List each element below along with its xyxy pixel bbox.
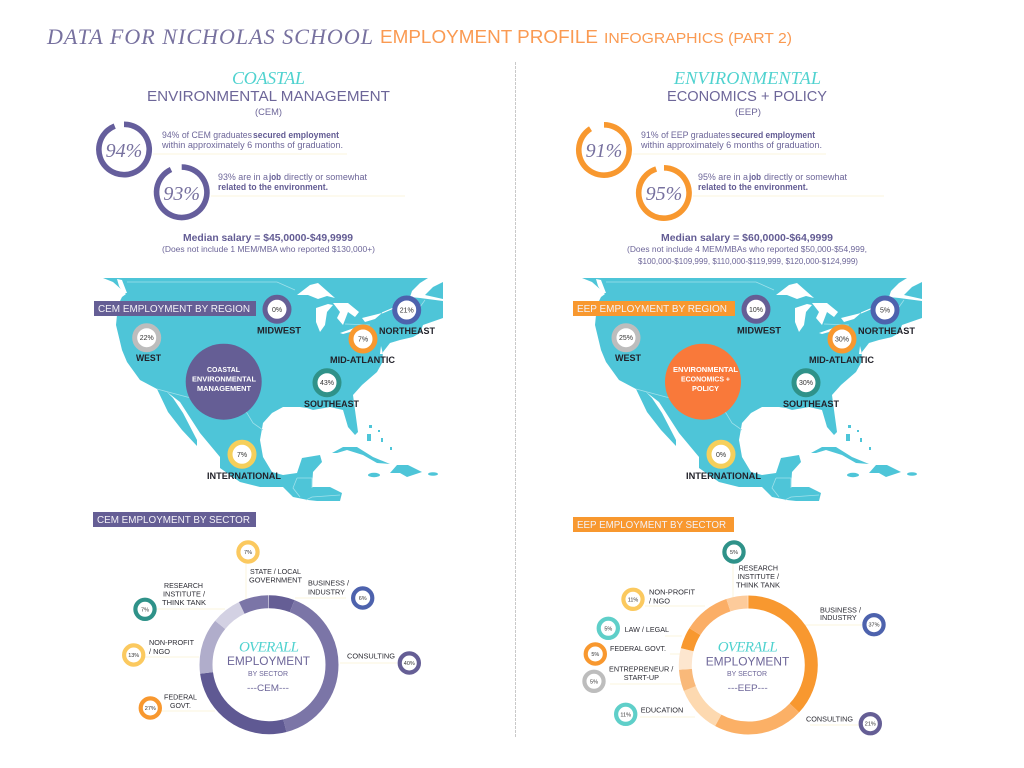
- region: Mid-Atlantic: [330, 327, 395, 366]
- sector: Business: INDUSTRY: [308, 587, 345, 596]
- text: related jobs: [693, 172, 884, 196]
- region: West: WEST: [136, 353, 161, 364]
- sector: Non-profit: [623, 588, 695, 609]
- sector: Law: 5%: [604, 626, 612, 632]
- badge: EEP region heading: EEP EMPLOYMENT BY REGION: [577, 303, 727, 315]
- median salary: [162, 232, 375, 254]
- text: related jobs: directly or somewhat: [764, 172, 848, 182]
- region: Northeast: NORTHEAST: [858, 326, 915, 337]
- sector: Federal: GOVT.: [170, 701, 191, 710]
- center circle: COASTAL: [207, 365, 240, 374]
- sector: State / Local: STATE / LOCAL: [250, 567, 301, 576]
- ring: 94% employed: 94%: [106, 140, 142, 162]
- center circle: [186, 344, 262, 420]
- center circle: POLICY: [692, 384, 719, 393]
- sector: Non-profit: NON-PROFIT: [149, 638, 194, 647]
- region: West: WEST: [615, 353, 641, 364]
- median salary: (Does not include 4 MEM/MBAs who reported $50,000-$54,999,: [627, 244, 867, 254]
- sector: Research: [135, 581, 206, 619]
- text: employment rate: [153, 130, 347, 154]
- donut chart: EEP: [685, 602, 811, 728]
- text: related jobs: related to the environment.: [218, 182, 328, 192]
- sector: Research: [724, 542, 780, 590]
- region: Northeast: [858, 298, 915, 337]
- region: Midwest: 0%: [272, 307, 282, 314]
- text: employment rate: secured employment: [253, 130, 339, 140]
- region: Southeast: SOUTHEAST: [304, 399, 359, 410]
- sector: Education: EDUCATION: [641, 706, 683, 715]
- sector: Non-profit: 11%: [628, 597, 638, 603]
- sector: Federal: 5%: [591, 652, 599, 658]
- region: Northeast: [379, 298, 435, 337]
- region: West: [614, 326, 641, 364]
- center circle: ENVIRONMENTAL: [192, 374, 256, 384]
- panel: EEP: [573, 68, 922, 733]
- sector: State / Local: 7%: [244, 550, 252, 556]
- region: Midwest: MIDWEST: [257, 326, 301, 337]
- region: International: 0%: [716, 452, 726, 459]
- badge: CEM region heading: CEM EMPLOYMENT BY REGION: [98, 303, 250, 315]
- sector: Research: 5%: [730, 550, 738, 556]
- text: related jobs: [211, 172, 405, 196]
- region: International: INTERNATIONAL: [686, 471, 761, 482]
- sector: Business: [820, 605, 884, 634]
- text: employment rate: 94% of CEM graduates: [162, 130, 252, 140]
- median salary: [627, 232, 867, 266]
- region: Mid-Atlantic: MID-ATLANTIC: [330, 355, 395, 366]
- sector: Education: [616, 705, 683, 724]
- median salary: (Does not include 1 MEM/MBA who reported $130,000+): [162, 244, 375, 254]
- donut center text: EEP: BY SECTOR: [727, 669, 768, 678]
- sector: Consulting: [806, 714, 880, 733]
- badge: EEP sector heading: EEP EMPLOYMENT BY SECTOR: [577, 519, 726, 531]
- heading: EEP: ECONOMICS + POLICY: [667, 89, 827, 105]
- text: employment rate: within approximately 6 months of graduation.: [640, 140, 822, 150]
- region: International: [207, 442, 281, 482]
- region: Mid-Atlantic: 30%: [835, 336, 849, 344]
- text: employment rate: within approximately 6 months of graduation.: [161, 140, 343, 150]
- sector: Business: BUSINESS /: [308, 579, 350, 588]
- sector: Non-profit: 13%: [128, 653, 139, 659]
- region: International: [686, 442, 761, 482]
- text: related jobs: job: [268, 172, 281, 182]
- sector: Federal: 27%: [145, 706, 156, 712]
- badge: CEM sector heading: CEM EMPLOYMENT BY SECTOR: [97, 514, 250, 526]
- sector: Entrepreneur: START-UP: [624, 673, 659, 682]
- region: Southeast: SOUTHEAST: [783, 399, 839, 410]
- sector: Research: INSTITUTE /: [738, 572, 780, 581]
- center circle: ENVIRONMENTAL: [673, 365, 738, 374]
- region: Midwest: MIDWEST: [737, 326, 781, 337]
- region: West: 22%: [140, 335, 154, 342]
- sector: Consulting: 40%: [404, 661, 415, 667]
- region: Mid-Atlantic: [809, 327, 874, 366]
- sector: Federal: FEDERAL: [164, 692, 197, 701]
- region: Mid-Atlantic: 7%: [358, 336, 368, 344]
- sector: State / Local: [238, 542, 302, 584]
- sector: Non-profit: / NGO: [149, 647, 170, 656]
- donut center text: CEM: OVERALL: [239, 640, 299, 656]
- text: related jobs: directly or somewhat: [284, 172, 368, 182]
- heading: CEM: COASTAL: [232, 68, 305, 88]
- title: [46, 24, 792, 49]
- region: International: 7%: [237, 452, 247, 459]
- ring: 93% related: 93%: [163, 183, 200, 205]
- sector: Business: [308, 579, 372, 608]
- sector: Research: INSTITUTE /: [163, 590, 206, 599]
- text: related jobs: job: [748, 172, 761, 182]
- heading: CEM: [147, 68, 390, 118]
- title: DATA FOR NICHOLAS SCHOOL: [46, 24, 373, 49]
- heading: EEP: (EEP): [735, 107, 761, 118]
- donut center text: CEM: BY SECTOR: [248, 669, 289, 678]
- donut center text: EEP: OVERALL: [718, 640, 778, 656]
- region: Northeast: 21%: [400, 308, 414, 314]
- region: Northeast: 5%: [880, 308, 890, 314]
- sector: Federal: [141, 692, 197, 718]
- region: West: 25%: [619, 335, 633, 342]
- panel: CEM: [93, 68, 443, 728]
- region: West: [135, 326, 161, 364]
- donut center text: EEP: [706, 640, 790, 694]
- donut chart: CEM: [206, 602, 332, 728]
- donut center text: CEM: [227, 640, 311, 694]
- sector: Law: [599, 619, 669, 638]
- text: related jobs: 93% are in a: [218, 172, 268, 182]
- heading: EEP: [667, 68, 827, 118]
- region: Southeast: 43%: [320, 380, 334, 387]
- heading: CEM: (CEM): [255, 107, 282, 118]
- sector: Consulting: [347, 652, 419, 673]
- sector: Law: LAW / LEGAL: [625, 625, 669, 634]
- median salary: $100,000-$109,999, $110,000-$119,999, $120,000-$124,999): [638, 256, 858, 266]
- sector: Research: RESEARCH: [164, 581, 203, 590]
- ring: 93% related: [157, 167, 207, 217]
- sector: Business: INDUSTRY: [820, 613, 857, 622]
- map: EEP region: [573, 278, 922, 501]
- sector: Non-profit: [124, 638, 194, 665]
- sector: Research: 7%: [141, 607, 149, 613]
- ring: 95% related: [639, 168, 689, 218]
- region: Southeast: [304, 371, 359, 410]
- sector: Research: THINK TANK: [162, 598, 206, 607]
- region: Southeast: 30%: [799, 380, 813, 387]
- center circle: [665, 344, 741, 420]
- median salary: Median salary = $45,0000-$49,9999: [183, 232, 353, 244]
- ring: 91% employed: 91%: [586, 140, 622, 162]
- sector: Research: RESEARCH: [739, 564, 778, 573]
- sector: Business: BUSINESS /: [820, 605, 862, 614]
- region: Midwest: [257, 297, 301, 337]
- sector: Education: 11%: [620, 712, 631, 718]
- region: Midwest: 10%: [749, 307, 763, 314]
- map: CEM region: [94, 278, 443, 501]
- sector: Entrepreneur: ENTREPRENEUR /: [609, 665, 674, 674]
- leader lines: EEP: [610, 563, 862, 725]
- region: Mid-Atlantic: MID-ATLANTIC: [809, 355, 874, 366]
- donut center text: EEP: EMPLOYMENT: [706, 655, 790, 669]
- sector: Consulting: 21%: [865, 722, 876, 728]
- text: employment rate: secured employment: [731, 130, 815, 140]
- sector: Federal: FEDERAL GOVT.: [610, 644, 666, 653]
- title: INFOGRAPHICS (PART 2): [604, 30, 792, 47]
- sector: Non-profit: / NGO: [649, 597, 670, 606]
- sector: Non-profit: NON-PROFIT: [649, 588, 695, 597]
- text: related jobs: related to the environment.: [698, 182, 808, 192]
- text: employment rate: [633, 130, 826, 154]
- ring: 95% related: 95%: [646, 183, 682, 205]
- heading: CEM: ENVIRONMENTAL MANAGEMENT: [147, 89, 390, 105]
- leader lines: CEM: [145, 564, 397, 711]
- region: Northeast: NORTHEAST: [379, 326, 435, 337]
- donut center text: EEP: ---EEP---: [728, 683, 768, 694]
- median salary: Median salary = $60,0000-$64,9999: [661, 232, 833, 244]
- sector: Research: THINK TANK: [736, 581, 780, 590]
- sector: Entrepreneur: 5%: [590, 679, 598, 685]
- sector: Entrepreneur: [584, 665, 674, 691]
- sector: Business: 6%: [359, 596, 367, 602]
- sector: Business: 37%: [868, 623, 880, 629]
- region: International: INTERNATIONAL: [207, 471, 281, 482]
- sector: Consulting: CONSULTING: [806, 714, 853, 723]
- title: EMPLOYMENT PROFILE: [380, 26, 598, 47]
- donut center text: CEM: EMPLOYMENT: [227, 654, 311, 668]
- text: employment rate: 91% of EEP graduates: [641, 130, 730, 140]
- text: related jobs: 95% are in a: [698, 172, 748, 182]
- region: Midwest: [737, 297, 781, 337]
- ring: 94% employed: [99, 124, 149, 175]
- region: Southeast: [783, 371, 839, 410]
- ring: 91% employed: [579, 125, 629, 175]
- center circle: MANAGEMENT: [197, 384, 251, 393]
- heading: EEP: ENVIRONMENTAL: [673, 68, 821, 88]
- sector: Consulting: CONSULTING: [347, 652, 395, 661]
- donut center text: CEM: ---CEM---: [247, 683, 289, 694]
- center circle: ECONOMICS +: [681, 374, 731, 384]
- sector: State / Local: GOVERNMENT: [249, 576, 302, 584]
- sector: Federal: [586, 644, 666, 664]
